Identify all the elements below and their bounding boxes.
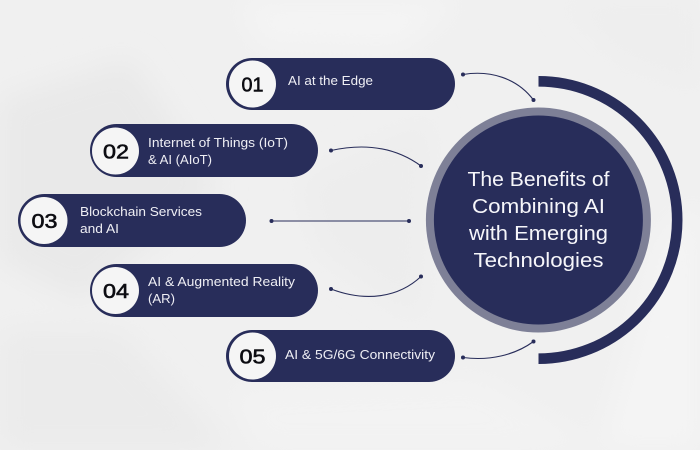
item 05: 05 (240, 346, 266, 368)
item 03: 03 (32, 210, 58, 233)
item 05: AI & 5G/6G Connectivity (285, 348, 436, 362)
item 02 (90, 124, 318, 177)
item 02: 02 (103, 140, 129, 164)
item 03: and AI (80, 222, 119, 236)
item 01: AI at the Edge (288, 74, 373, 88)
item 03: Blockchain Services (80, 205, 202, 219)
connector 2 (329, 147, 423, 168)
central heading: with Emerging (468, 222, 608, 245)
connector 4 (329, 274, 423, 296)
central heading: Combining AI (472, 195, 605, 218)
connector 1 (461, 72, 536, 102)
item 04 (90, 264, 318, 317)
item 01 (226, 58, 455, 110)
item 04: 04 (103, 280, 129, 303)
connector 5 (461, 340, 536, 360)
connector 3 (270, 219, 411, 223)
item 04: (AR) (148, 292, 175, 306)
item 05 (226, 330, 455, 382)
central heading: The Benefits of (468, 168, 610, 191)
central heading (468, 168, 610, 272)
item 04: AI & Augmented Reality (148, 275, 296, 289)
item 03 (18, 194, 246, 247)
central circle (426, 108, 651, 332)
central heading: Technologies (474, 249, 604, 272)
outer arc (538, 81, 677, 359)
item 02: Internet of Things (IoT) (148, 136, 288, 150)
item 02: & AI (AIoT) (148, 153, 212, 167)
item 01: 01 (242, 74, 264, 96)
